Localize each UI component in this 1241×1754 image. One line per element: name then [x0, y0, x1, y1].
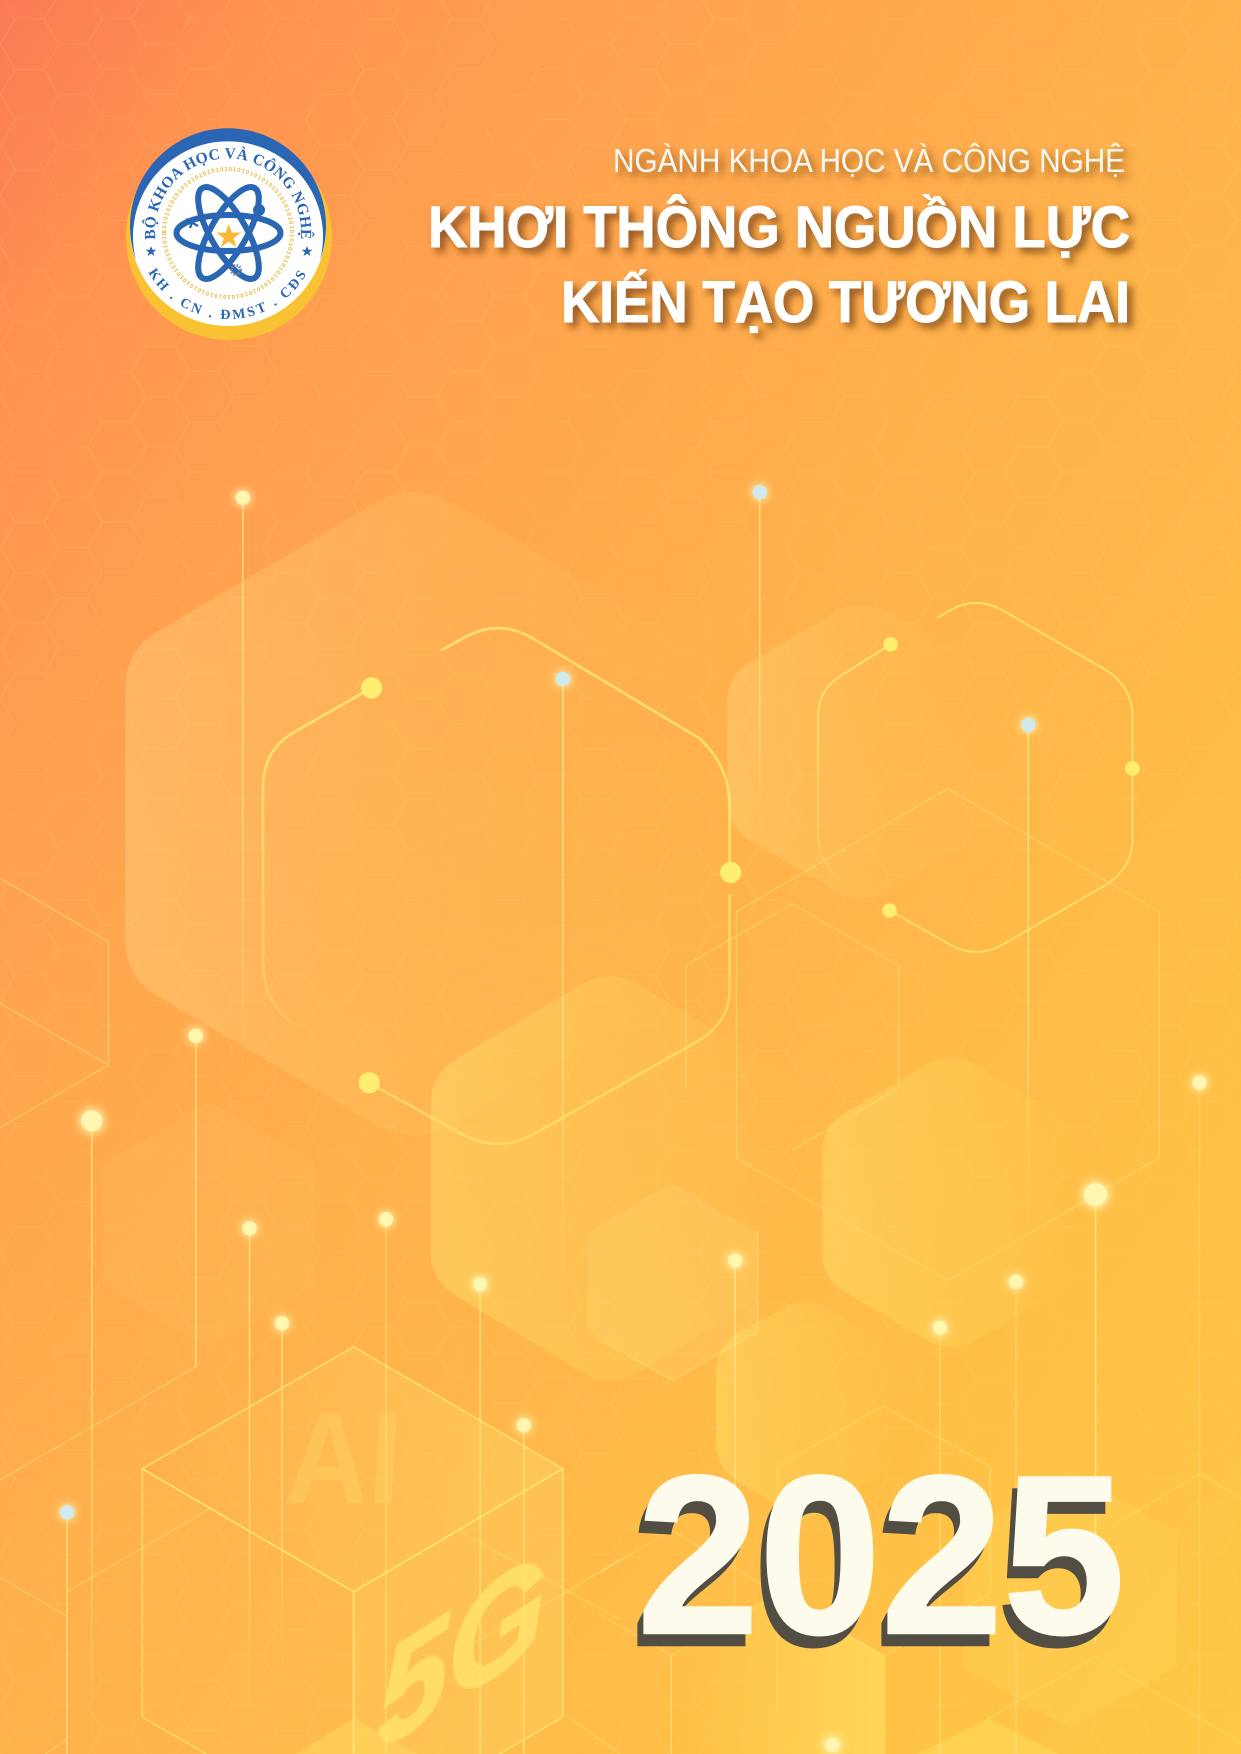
thin hexagon outlines [0, 789, 1241, 1754]
translucent hexagons [103, 492, 1177, 1754]
circuit outline left [263, 628, 730, 1144]
logo name arc: BỘ KHOA HỌC VÀ CÔNG NGHỆ [142, 146, 314, 240]
circuit outline right [818, 603, 1132, 952]
logo side stars [146, 246, 312, 256]
logo plus mark [186, 217, 198, 228]
logo [126, 128, 332, 340]
logo gear [232, 266, 240, 274]
vertical lines with dots [66, 492, 1200, 1754]
logo star [216, 224, 241, 247]
subtitle: NGÀNH KHOA HỌC VÀ CÔNG NGHỆ [613, 142, 1125, 179]
headline line 1: KHƠI THÔNG NGUỒN LỰC [428, 195, 1130, 260]
logo bottom arc: KH . CN . ĐMST . CĐS [148, 267, 306, 320]
logo nucleus dot [253, 204, 265, 216]
AI label on cube: AI [282, 1385, 405, 1531]
year 2025: 2025 [631, 1440, 1119, 1693]
wireframe cube [142, 1347, 563, 1754]
logo atom [176, 179, 280, 287]
logo blue crescent [130, 128, 326, 260]
glowing dots [58, 483, 1209, 1754]
headline line 2: KIẾN TẠO TƯƠNG LAI [561, 270, 1130, 335]
logo binary ring: 101010101010101010101010101010101010101010101010101010101010101010101010101010101010101010101 [162, 166, 294, 300]
year 2025: 2025 [637, 1428, 1125, 1681]
